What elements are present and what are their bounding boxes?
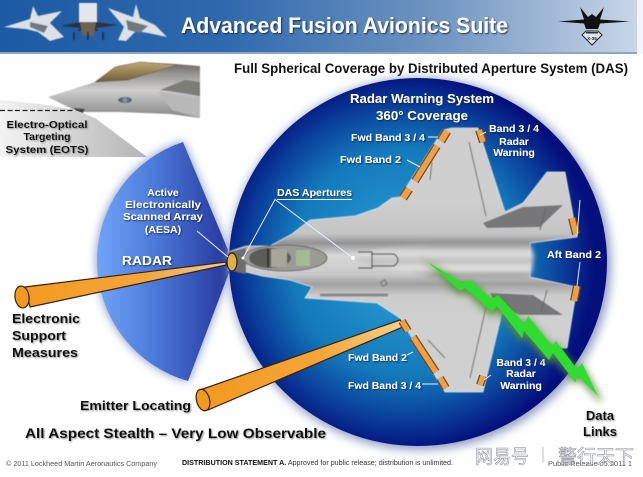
label: electronic support measures: Electronic bbox=[12, 311, 80, 326]
beam: emitter locating bbox=[194, 320, 405, 412]
label: AESA: Electronically bbox=[125, 199, 201, 211]
label: lower Band 3/4 radar warning: Radar bbox=[506, 368, 536, 380]
icon: program logo: X-35 bbox=[587, 36, 597, 41]
label: EOTS bbox=[6, 119, 88, 156]
label: lower Fwd Band 3/4: Fwd Band 3 / 4 bbox=[348, 380, 421, 392]
heading: radar warning system: 360° Coverage bbox=[376, 108, 468, 123]
watermark: 警行天下 bbox=[558, 446, 634, 468]
label: upper Fwd Band 3/4: Fwd Band 3 / 4 bbox=[351, 132, 425, 144]
label: EOTS: System (EOTS) bbox=[6, 144, 88, 156]
canopy bbox=[243, 245, 327, 271]
beam: electronic support measures bbox=[14, 262, 226, 309]
label: EOTS: Targeting bbox=[23, 131, 71, 143]
shadow: globe glow bbox=[229, 78, 611, 450]
label: lower Fwd Band 2: Fwd Band 2 bbox=[348, 352, 407, 364]
DAS aperture markers bbox=[242, 256, 355, 260]
label: RADAR: RADAR bbox=[122, 254, 172, 268]
label: data links bbox=[583, 408, 617, 439]
label: data links: Data bbox=[586, 408, 615, 423]
apertures: orange sensors bbox=[402, 130, 577, 388]
globe: coverage sphere bbox=[229, 78, 607, 446]
label: Aft Band 2: Aft Band 2 bbox=[547, 249, 601, 261]
label: AESA: (AESA) bbox=[145, 224, 181, 236]
label: AESA: Active bbox=[147, 187, 179, 199]
label: upper Band 3/4 radar warning: Band 3 / 4 bbox=[489, 123, 539, 135]
panel lines bbox=[428, 142, 547, 378]
label: AESA: Scanned Array bbox=[123, 211, 203, 223]
footer: public release: Public Release 05.2011 1 bbox=[548, 461, 632, 468]
engine section bbox=[340, 243, 534, 277]
icon: three F-35 jets bbox=[4, 3, 167, 41]
heading: radar warning system: Radar Warning System bbox=[350, 91, 494, 106]
footer: distribution statement: DISTRIBUTION STATEMENT A. Approved for public release; distribution is unlimited. bbox=[182, 460, 453, 467]
title: Advanced Fusion Avionics Suite bbox=[181, 13, 508, 38]
label: DAS Apertures: DAS Apertures bbox=[277, 187, 352, 199]
data link lightning bbox=[421, 258, 602, 402]
label: lower Band 3/4 radar warning bbox=[496, 357, 546, 392]
label: upper Band 3/4 radar warning: Radar bbox=[499, 136, 529, 148]
stabilizer lower bbox=[490, 293, 563, 315]
aircraft planform bbox=[228, 128, 577, 392]
heading: radar warning system bbox=[350, 91, 494, 123]
stealth statement: All Aspect Stealth – Very Low Observable bbox=[25, 425, 326, 441]
header band bbox=[0, 0, 643, 54]
label: upper Band 3/4 radar warning bbox=[489, 123, 539, 159]
side-view jet nose bbox=[48, 62, 200, 118]
label: data links: Links bbox=[583, 424, 617, 439]
label: AESA bbox=[123, 187, 203, 236]
icon: program logo bbox=[558, 7, 630, 45]
label: lower Band 3/4 radar warning: Warning bbox=[500, 380, 542, 392]
watermark bbox=[475, 446, 634, 468]
watermark: 网易号 bbox=[475, 447, 529, 468]
label: electronic support measures: Support bbox=[12, 328, 67, 343]
label: electronic support measures bbox=[12, 311, 80, 360]
label: electronic support measures: Measures bbox=[12, 345, 78, 360]
label: upper Band 3/4 radar warning: Warning bbox=[493, 147, 535, 159]
label: emitter locating: Emitter Locating bbox=[80, 398, 191, 413]
leader lines bbox=[197, 132, 580, 384]
label: upper Fwd Band 2: Fwd Band 2 bbox=[340, 154, 401, 166]
footer: copyright: © 2011 Lockheed Martin Aeronautics Company bbox=[6, 460, 158, 468]
EOTS wedge bbox=[0, 100, 147, 157]
label: lower Band 3/4 radar warning: Band 3 / 4 bbox=[496, 357, 546, 369]
stabilizer upper bbox=[483, 205, 563, 228]
radar fan bbox=[97, 142, 233, 381]
nose dark tip bbox=[228, 248, 246, 274]
shadow: radar fan glow bbox=[97, 142, 233, 381]
radar antenna bbox=[227, 253, 237, 271]
heading: spherical coverage: Full Spherical Coverage by Distributed Aperture System (DAS) bbox=[234, 61, 628, 76]
label: EOTS: Electro-Optical bbox=[6, 119, 88, 131]
lift fan outline bbox=[358, 252, 398, 268]
